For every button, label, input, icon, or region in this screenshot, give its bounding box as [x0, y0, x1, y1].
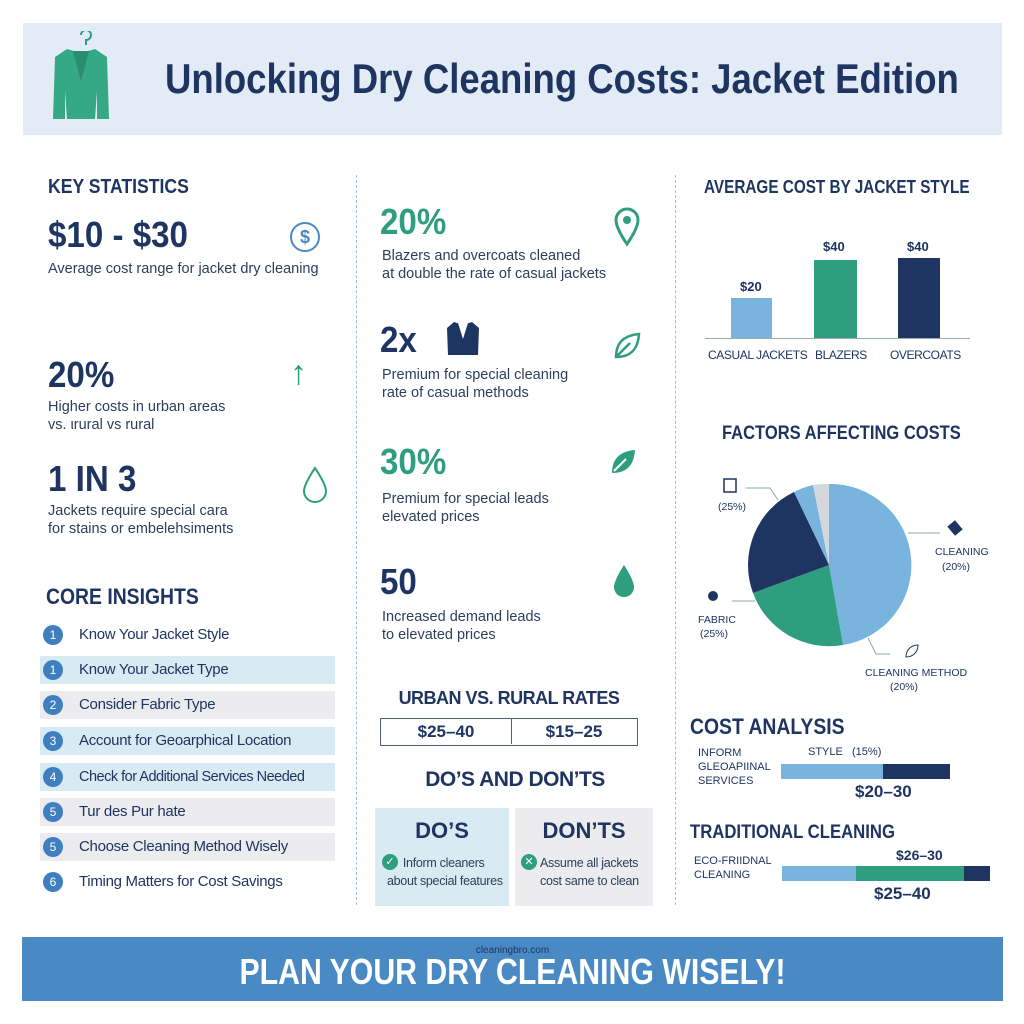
- do's and don'ts: ✕: [524, 856, 534, 868]
- pie chart: factors affecting costs: (20%): [890, 681, 918, 693]
- panel: key statistics: 20%: [48, 354, 114, 395]
- cost analysis: SERVICES: [698, 775, 753, 787]
- icon: jacket: [53, 31, 109, 119]
- panel: core insights: CORE INSIGHTS: [46, 584, 199, 609]
- panel: middle stats: Blazers and overcoats cleaned: [382, 248, 580, 264]
- traditional cleaning: $25–40: [874, 884, 931, 903]
- panel: core insights: 1: [50, 628, 56, 642]
- panel: core insights: 4: [50, 770, 56, 784]
- panel: middle stats: at double the rate of casual jackets: [382, 266, 606, 282]
- pie chart: factors affecting costs: (20%): [942, 561, 970, 573]
- panel: core insights: 1: [50, 663, 56, 677]
- bar chart: average cost by jacket style: AVERAGE COST BY JACKET STYLE: [704, 177, 970, 197]
- traditional cleaning: $26–30: [896, 847, 943, 863]
- do's and don'ts: Assume all jackets: [540, 856, 638, 870]
- panel: middle stats: 2x: [380, 319, 417, 360]
- panel: core insights: Choose Cleaning Method Wisely: [79, 838, 288, 855]
- panel: key statistics: [48, 176, 327, 537]
- icon: dollar: $: [300, 227, 310, 247]
- panel: middle stats: Premium for special leads: [382, 491, 549, 507]
- cost analysis: $20–30: [855, 782, 912, 801]
- icon: pin: [614, 208, 640, 246]
- pie chart: factors affecting costs: (25%): [700, 628, 728, 640]
- cost analysis: STYLE (15%): [808, 746, 881, 758]
- icon: leaf: [614, 332, 640, 358]
- pie chart: factors affecting costs: (25%): [718, 501, 746, 513]
- do's and don'ts: cost same to clean: [540, 874, 639, 888]
- header banner: [23, 23, 1002, 135]
- urban vs rural: [380, 688, 638, 746]
- panel: middle stats: Premium for special cleaning: [382, 367, 568, 383]
- panel: middle stats: Increased demand leads: [382, 609, 541, 625]
- pie chart: factors affecting costs: FACTORS AFFECTING COSTS: [722, 423, 961, 444]
- bar chart: average cost by jacket style: BLAZERS: [815, 348, 867, 362]
- bar chart: average cost by jacket style: CASUAL JACKETS: [708, 348, 807, 362]
- cost analysis: GLEOAPIINAL: [698, 761, 771, 773]
- panel: core insights: 5: [50, 805, 56, 819]
- footer banner: [22, 937, 1003, 1001]
- pie chart: factors affecting costs: CLEANING METHOD: [865, 667, 968, 679]
- panel: key statistics: vs. ιrural vs rural: [48, 417, 154, 433]
- panel: middle stats: 30%: [380, 441, 446, 482]
- panel: core insights: Know Your Jacket Type: [79, 661, 228, 678]
- traditional cleaning: CLEANING: [694, 869, 750, 881]
- bar chart: average cost by jacket style: $40: [907, 239, 929, 254]
- panel: core insights: Consider Fabric Type: [79, 696, 215, 713]
- cost analysis: [690, 714, 950, 801]
- do's and don'ts: [375, 768, 653, 906]
- pie chart: factors affecting costs: FABRIC: [698, 614, 736, 626]
- panel: key statistics: KEY STATISTICS: [48, 176, 189, 198]
- icon: blazer: [447, 322, 479, 355]
- panel: core insights: Account for Geoarphical Location: [79, 732, 291, 749]
- icon: dollar: [290, 222, 320, 252]
- panel: middle stats: [380, 201, 640, 643]
- panel: key statistics: $10 - $30: [48, 214, 188, 255]
- panel: core insights: [40, 584, 335, 892]
- panel: middle stats: rate of casual methods: [382, 385, 529, 401]
- do's and don'ts: DON’TS: [542, 818, 626, 843]
- traditional cleaning: ECO-FRIIDNAL: [694, 855, 772, 867]
- icon: drop: [303, 466, 327, 503]
- panel: core insights: 3: [50, 734, 56, 748]
- panel: middle stats: 50: [380, 561, 417, 602]
- do's and don'ts: DO’S: [415, 818, 469, 843]
- panel: key statistics: 1 IN 3: [48, 458, 136, 499]
- panel: middle stats: 20%: [380, 201, 446, 242]
- cost analysis: COST ANALYSIS: [690, 714, 845, 739]
- do's and don'ts: ✓: [385, 856, 395, 868]
- urban vs rural: $15–25: [546, 722, 602, 741]
- panel: key statistics: Higher costs in urban areas: [48, 399, 225, 415]
- do's and don'ts: Inform cleaners: [403, 856, 485, 870]
- panel: core insights: Know Your Jacket Style: [79, 626, 229, 643]
- panel: key statistics: for stains or embelehsiments: [48, 521, 233, 537]
- footer banner: PLAN YOUR DRY CLEANING WISELY!: [239, 951, 786, 992]
- panel: middle stats: to elevated prices: [382, 627, 496, 643]
- cost analysis: INFORM: [698, 747, 741, 759]
- urban vs rural: URBAN VS. RURAL RATES: [399, 688, 619, 708]
- urban vs rural: $25–40: [418, 722, 474, 741]
- bar chart: average cost by jacket style: $20: [740, 279, 762, 294]
- icon: arrow up: ↑: [290, 354, 307, 392]
- pie chart: factors affecting costs: [698, 423, 989, 693]
- title: Unlocking Dry Cleaning Costs: Jacket Edition: [165, 55, 959, 102]
- panel: middle stats: elevated prices: [382, 509, 480, 525]
- panel: key statistics: Jackets require special cara: [48, 503, 228, 519]
- panel: core insights: Check for Additional Services Needed: [79, 769, 304, 785]
- panel: key statistics: Average cost range for jacket dry cleaning: [48, 261, 319, 277]
- pie chart: factors affecting costs: CLEANING: [935, 546, 989, 558]
- panel: core insights: 2: [50, 698, 56, 712]
- panel: core insights: Tur des Pur hate: [79, 803, 185, 820]
- footer banner: cleaningbro.com: [476, 945, 549, 956]
- icon: drop filled: [614, 565, 634, 597]
- icon: leaf 2: [612, 450, 635, 473]
- panel: core insights: 6: [50, 875, 56, 889]
- bar chart: average cost by jacket style: $40: [823, 239, 845, 254]
- do's and don'ts: DO’S AND DON’TS: [425, 768, 605, 791]
- traditional cleaning: TRADITIONAL CLEANING: [690, 822, 895, 843]
- panel: core insights: Timing Matters for Cost Savings: [79, 873, 283, 890]
- traditional cleaning: [690, 822, 990, 903]
- do's and don'ts: about special features: [387, 874, 503, 888]
- bar chart: average cost by jacket style: OVERCOATS: [890, 348, 961, 362]
- panel: core insights: 5: [50, 840, 56, 854]
- bar chart: average cost by jacket style: [704, 177, 970, 362]
